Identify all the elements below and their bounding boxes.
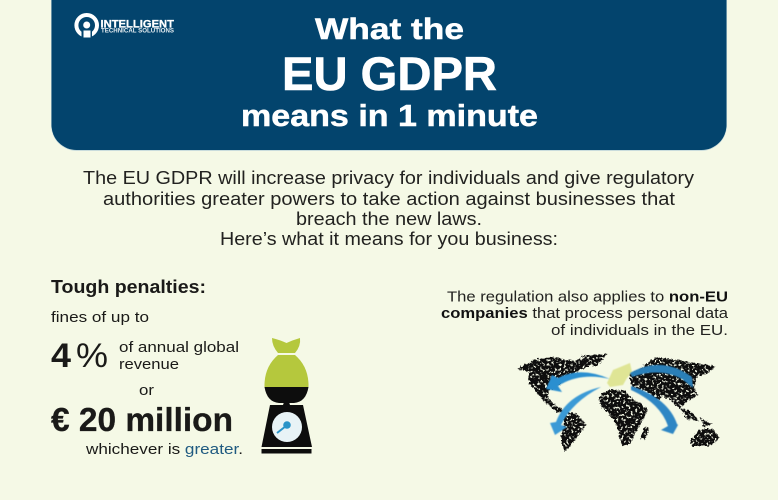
scale dial [272, 412, 302, 442]
arrow: to Asia [630, 365, 693, 388]
bag neck [272, 338, 300, 353]
scale pan [264, 387, 308, 403]
revenue label [119, 340, 239, 373]
non-EU companies text: The regulation also applies to non-EU [447, 289, 728, 306]
title line 3: means in 1 minute [241, 98, 538, 133]
icon: money bag on scale [262, 338, 312, 454]
non-EU companies text: companies that process personal data [441, 305, 729, 322]
Africa [600, 390, 647, 445]
logo name: INTELLIGENT [100, 18, 174, 30]
4 percent figure [51, 337, 108, 375]
arrow: to Africa and south [631, 386, 678, 434]
intro text: breach the new laws. [296, 209, 482, 229]
Eurasia [630, 358, 713, 407]
fines lead-in: fines of up to [51, 310, 149, 326]
logo tagline: TECHNICAL SOLUTIONS [101, 28, 174, 35]
intro text: The EU GDPR will increase privacy for individuals and give regulatory [83, 168, 694, 188]
Madagascar [642, 428, 648, 439]
continents [520, 355, 718, 450]
whichever is greater: whichever is greater . [85, 441, 243, 458]
20 million figure: € 20 million [51, 401, 233, 438]
scale base [262, 402, 312, 447]
icon: logo ring [76, 15, 97, 38]
or: or [139, 383, 154, 399]
intro text: Here’s what it means for you business: [220, 229, 558, 249]
intro text: authorities greater powers to take action against businesses that [103, 189, 675, 209]
title line 1: What the [315, 13, 464, 46]
North America [520, 358, 600, 411]
revenue label: revenue [119, 357, 179, 373]
panel: tough penalties [51, 276, 243, 458]
bag body [264, 355, 309, 387]
Greenland [583, 355, 605, 365]
header banner [51, 0, 727, 151]
4 percent figure: % [76, 337, 108, 375]
penalties heading: Tough penalties: [51, 276, 206, 297]
Europe highlight [607, 363, 632, 387]
non-EU companies text [441, 289, 729, 339]
non-EU companies text: of individuals in the EU. [551, 322, 728, 339]
arrow: to North America [546, 372, 610, 392]
Indonesia islands [682, 410, 697, 420]
South America [562, 413, 585, 450]
4 percent figure: 4 [51, 337, 71, 375]
world map [520, 355, 718, 450]
intro text [83, 168, 694, 249]
Australia [692, 430, 718, 445]
arrow: to South America [550, 387, 601, 435]
revenue label: of annual global [119, 340, 239, 356]
title line 2: EU GDPR [282, 47, 497, 100]
logo [76, 15, 174, 38]
arrows to other regions [546, 365, 693, 435]
